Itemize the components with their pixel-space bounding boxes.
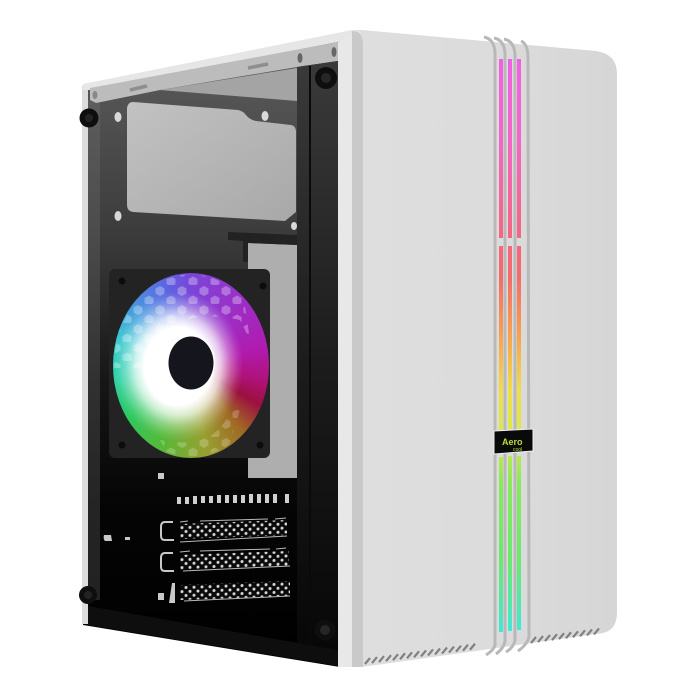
thumb screw bottom left xyxy=(79,586,97,604)
fan corner screws xyxy=(118,278,266,448)
bracket rail xyxy=(228,232,297,262)
fan frame xyxy=(109,269,270,458)
thumb screw top right xyxy=(315,67,337,89)
Aerocool logo badge xyxy=(494,429,533,454)
front panel xyxy=(350,30,617,667)
Aerocool logo badge: cool xyxy=(513,447,522,453)
left inner column xyxy=(88,100,100,600)
top white edge xyxy=(83,30,362,90)
left glass edge xyxy=(82,85,88,624)
fan white glow xyxy=(113,291,243,441)
interior back panel xyxy=(88,50,300,655)
rear post xyxy=(297,61,338,664)
case details above fan xyxy=(79,31,600,667)
PCI brackets xyxy=(161,522,174,571)
bottom frame bar xyxy=(88,606,338,666)
PCI slots xyxy=(180,518,290,601)
expansion vent bars xyxy=(179,494,287,504)
rear fan opening xyxy=(248,243,297,478)
fan hexagon grille xyxy=(114,273,250,458)
front frame strip xyxy=(338,31,363,667)
top light wedge xyxy=(160,68,297,101)
top metal bar xyxy=(90,42,338,103)
Aerocool logo badge: Aero xyxy=(502,437,523,447)
RGB fan glow xyxy=(113,273,269,458)
front panel grooves xyxy=(484,37,529,655)
fan hub xyxy=(167,335,215,391)
PSU opening xyxy=(127,102,296,221)
mounting holes xyxy=(114,111,297,230)
bottom ventilation slots xyxy=(365,628,599,664)
thumb screw bottom right xyxy=(314,620,336,640)
RGB light strips xyxy=(501,59,519,632)
bracket details xyxy=(104,473,175,603)
thumb screw top left xyxy=(80,108,98,128)
post inner edge xyxy=(309,66,311,656)
glass side background xyxy=(83,32,352,667)
